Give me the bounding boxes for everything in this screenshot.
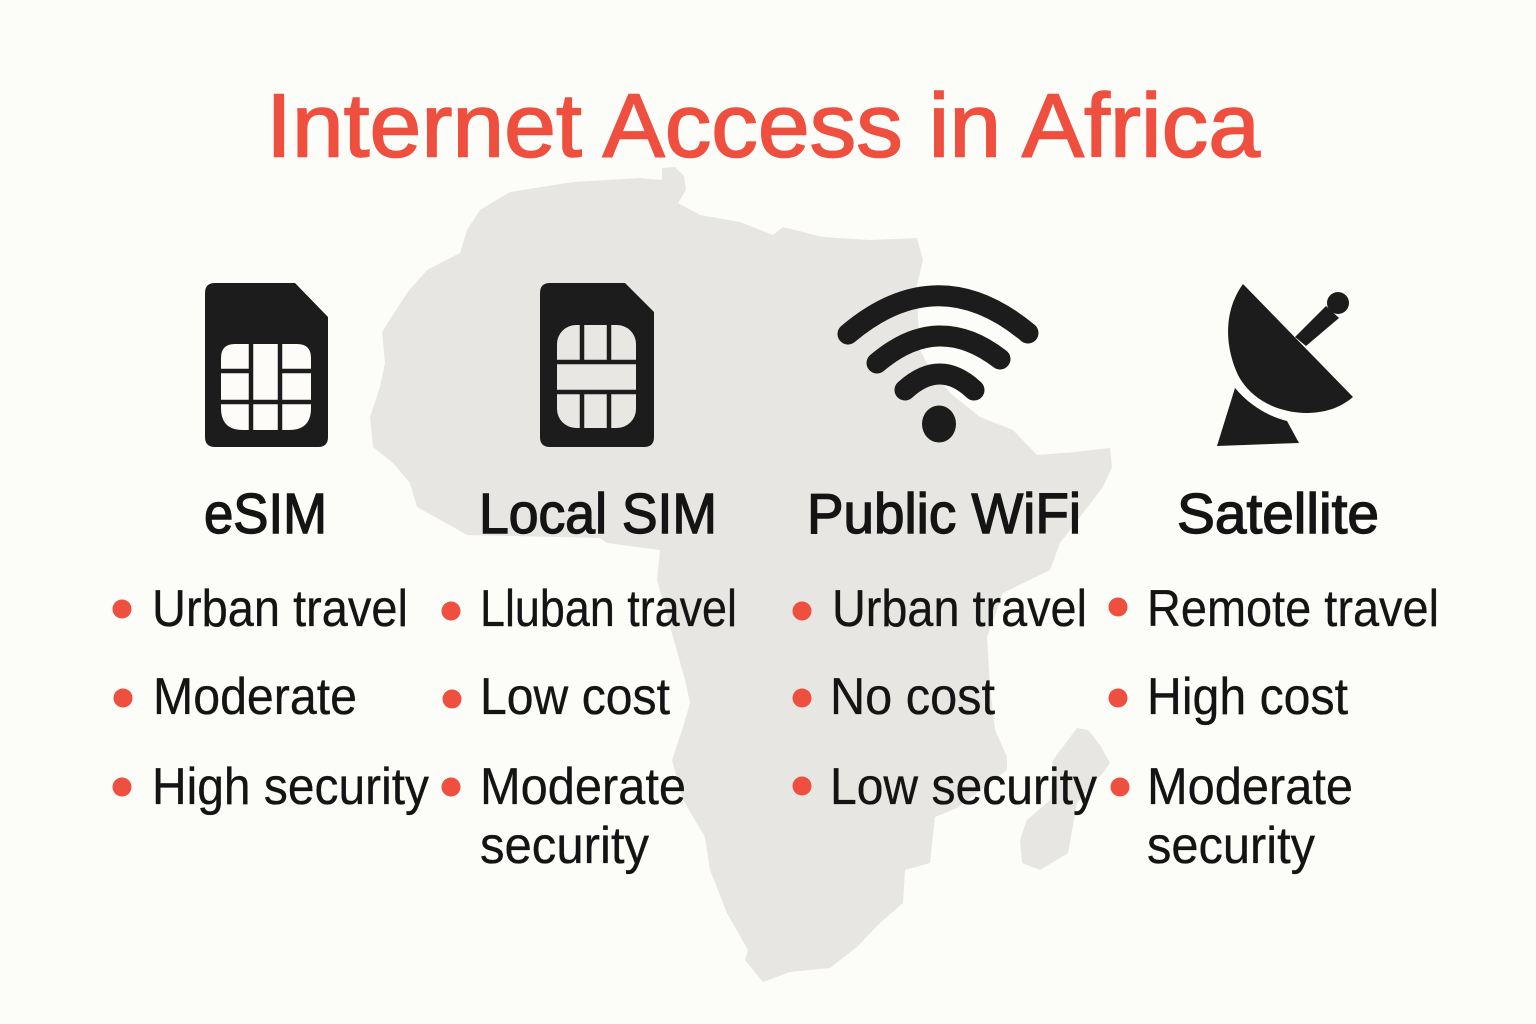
item: High cost: High cost [1147, 668, 1349, 726]
item: Moderate security: security [480, 817, 649, 875]
icon: Local SIM card [540, 283, 654, 447]
panel: Local SIM [442, 283, 737, 875]
list: eSIM attributes [112, 580, 429, 816]
heading: Satellite: Satellite [1177, 482, 1379, 546]
heading: eSIM: eSIM [204, 482, 327, 546]
item: Moderate security [1110, 758, 1353, 875]
item: Moderate security: Moderate [1147, 758, 1353, 816]
heading: Local SIM: Local SIM [479, 482, 717, 546]
list: Local SIM attributes [442, 580, 737, 875]
item: Remote travel: Remote travel [1147, 580, 1439, 638]
item: Moderate security [442, 758, 686, 875]
list: Satellite attributes [1108, 580, 1439, 875]
background map: Africa silhouette [370, 167, 1112, 982]
icon: eSIM card [205, 283, 328, 447]
item: Low security: Low security [830, 758, 1097, 816]
item: Lluban travel: Lluban travel [480, 580, 737, 638]
panel: eSIM [112, 283, 429, 816]
item: Moderate security: Moderate [480, 758, 686, 816]
title: Internet Access in Africa [266, 76, 1261, 176]
icon: WiFi signal [848, 296, 1028, 442]
item: No cost: No cost [830, 668, 996, 726]
icon: satellite dish [1217, 284, 1353, 446]
item: Moderate security: security [1147, 817, 1315, 875]
panel: Satellite [1108, 284, 1439, 875]
item: High security: High security [152, 758, 429, 816]
heading: Public WiFi: Public WiFi [807, 482, 1081, 546]
list: Public WiFi attributes [792, 580, 1097, 816]
item: Urban travel: Urban travel [832, 580, 1087, 638]
item: Low cost: Low cost [480, 668, 671, 726]
panel: Public WiFi [792, 296, 1097, 816]
item: Urban travel: Urban travel [152, 580, 408, 638]
item: Moderate: Moderate [153, 668, 357, 726]
